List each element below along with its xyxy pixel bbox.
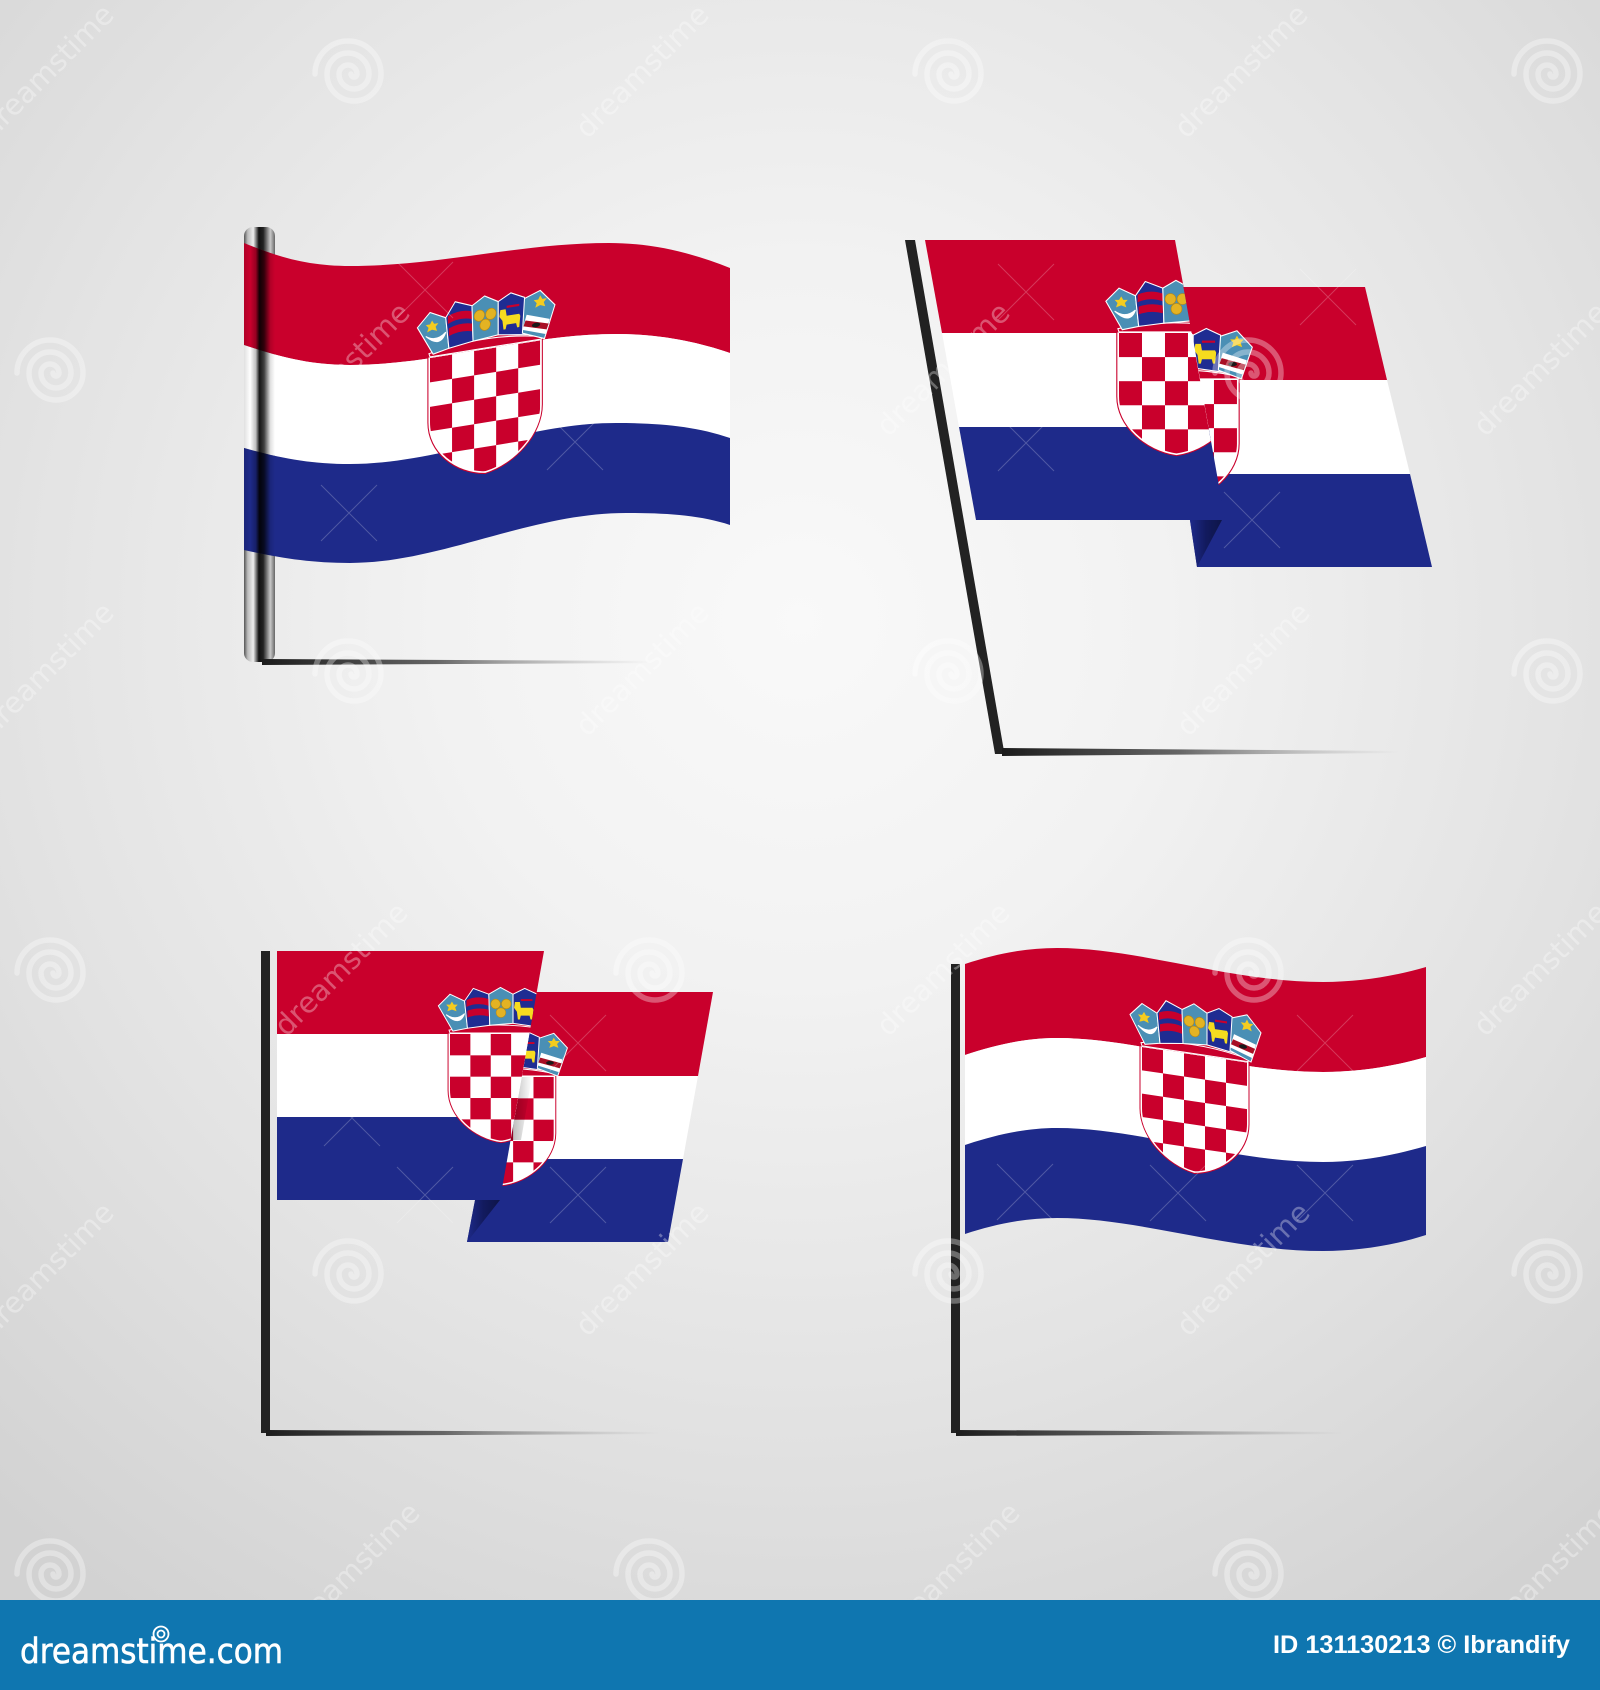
white band: [965, 1038, 1426, 1162]
watermark text: dreamstime: [1169, 1195, 1317, 1343]
front panel: [277, 951, 565, 1200]
blue band: [244, 423, 730, 563]
pole: [951, 964, 960, 1433]
pole ground shadow: [262, 659, 650, 665]
back panel: [440, 992, 713, 1242]
pole shading over flag: [244, 240, 275, 565]
crease shading: [510, 1077, 532, 1140]
watermark text: dreamstime: [1169, 595, 1317, 743]
watermark text: dreamstime: [568, 0, 716, 145]
chrome pole: [244, 227, 275, 662]
white band: [244, 334, 730, 464]
footer logo text: dreamstime.com: [20, 1632, 283, 1672]
flag 2: folded flag on slanted pole: [905, 240, 1432, 756]
watermark text: dreamstime: [279, 1495, 427, 1643]
watermark cross lines: [321, 262, 1356, 1223]
watermark text: dreamstime: [568, 595, 716, 743]
flag 4: waving flag on thin pole: [951, 948, 1426, 1436]
watermark text: dreamstime: [869, 295, 1017, 443]
watermark text: dreamstime: [1167, 0, 1315, 145]
footer logo spiral: [154, 1626, 168, 1642]
front panel: [925, 240, 1249, 520]
fold shadow: [1190, 520, 1222, 567]
fold shadow: [467, 1200, 500, 1242]
watermark text: dreamstime: [869, 895, 1017, 1043]
pole: [261, 951, 270, 1433]
watermark text: dreamstime: [269, 295, 417, 443]
flag 3: folded flag on straight pole: [261, 951, 713, 1436]
back panel: [1109, 287, 1432, 567]
pole ground shadow: [266, 1430, 660, 1436]
red band: [244, 243, 730, 365]
watermark text: dreamstime: [267, 895, 415, 1043]
coat of arms: [1130, 994, 1261, 1183]
image id and credit: ID 131130213 © Ibrandify: [1273, 1631, 1570, 1659]
pole ground shadow: [956, 1430, 1343, 1436]
slanted pole: [905, 240, 1004, 754]
watermark text: dreamstime: [879, 1495, 1027, 1643]
footer bar: [0, 1600, 1600, 1690]
flag 1: waving flag on chrome pole: [244, 227, 730, 665]
pole ground shadow: [1002, 748, 1399, 756]
watermark text: dreamstime: [568, 1195, 716, 1343]
coat of arms: [417, 285, 555, 484]
blue band: [965, 1128, 1426, 1251]
red band: [965, 948, 1426, 1072]
